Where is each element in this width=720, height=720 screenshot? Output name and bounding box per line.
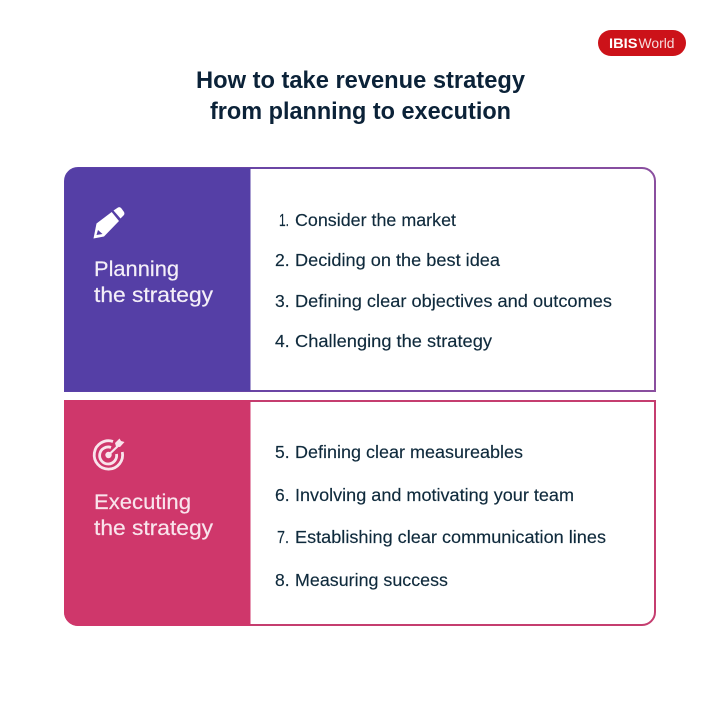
logo: IBISWorld badge: IBIS [609, 35, 638, 51]
panel: executing the strategy [64, 400, 655, 626]
planning steps list: 2. [275, 250, 290, 270]
executing steps list: 7. [277, 527, 289, 547]
title: How to take revenue strategy [196, 67, 526, 94]
executing heading: the strategy [94, 516, 213, 540]
planning steps list: Defining clear objectives and outcomes [295, 291, 612, 311]
planning steps list: Challenging the strategy [295, 331, 492, 351]
planning steps list [275, 210, 612, 351]
executing steps list: Involving and motivating your team [295, 485, 574, 505]
executing steps list: Defining clear measureables [295, 442, 523, 462]
executing steps list: Measuring success [295, 570, 448, 590]
logo: IBISWorld badge: World [638, 35, 674, 51]
panel: planning the strategy [65, 168, 655, 391]
executing steps list: 6. [275, 485, 290, 505]
executing steps list: 8. [275, 570, 290, 590]
planning steps list: 3. [275, 291, 290, 311]
planning steps list: Deciding on the best idea [295, 250, 500, 270]
executing colour block [64, 400, 250, 626]
planning steps list: 1. [279, 210, 289, 230]
planning colour block [65, 168, 250, 391]
planning steps list: 4. [275, 331, 290, 351]
planning heading [94, 257, 213, 307]
icon: target with arrow [94, 438, 124, 469]
executing steps list: Establishing clear communication lines [295, 527, 606, 547]
title: from planning to execution [210, 98, 511, 125]
executing steps list [275, 442, 606, 590]
title [196, 67, 526, 125]
planning steps list: Consider the market [295, 210, 456, 230]
planning heading: the strategy [94, 283, 213, 307]
planning heading: Planning [94, 257, 179, 281]
executing steps list: 5. [275, 442, 290, 462]
icon: pencil [94, 207, 124, 238]
logo: IBISWorld badge [598, 30, 686, 56]
executing heading [94, 490, 213, 540]
executing heading: Executing [94, 490, 191, 514]
